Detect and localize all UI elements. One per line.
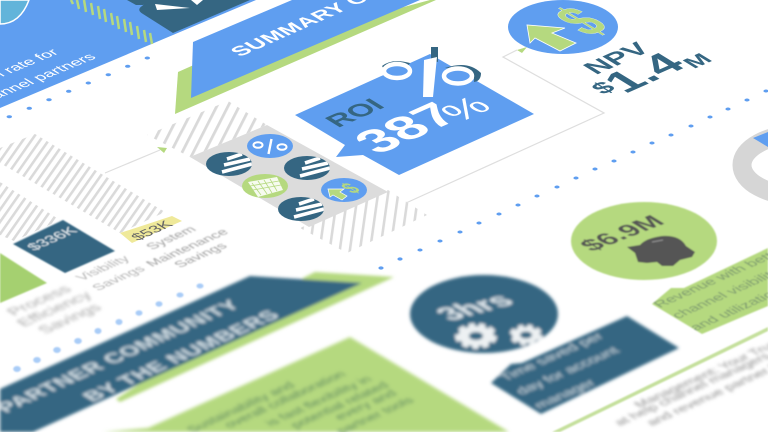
panel: top-left blue partner panel <box>0 0 256 108</box>
label: process efficiency savings: Savings <box>34 302 106 336</box>
connector: hatch to icon grid <box>105 147 167 173</box>
connector: ROI to NPV <box>406 47 604 203</box>
callout text: Time saved per <box>497 331 608 383</box>
value: 6.9M: $6.9M <box>573 212 671 255</box>
value: 336K: $336K <box>24 225 82 253</box>
text: NPV value: NPV <box>576 38 657 78</box>
icon: blue NPV circle: $ <box>336 180 367 197</box>
value: 53K: $53K <box>128 219 177 243</box>
panel: summary banner <box>175 0 436 114</box>
icon: gears <box>458 326 540 346</box>
label: visibility savings: Visibility <box>73 254 133 282</box>
text: NPV value <box>576 38 718 99</box>
bar: green process savings <box>0 253 47 303</box>
bar: visibility savings <box>13 220 115 273</box>
callout text: day for account <box>513 346 623 397</box>
label: process efficiency savings: Efficiency <box>13 289 97 329</box>
metric: 6.9M circle <box>571 202 717 280</box>
text: NPV value: M <box>678 50 718 72</box>
icon: green calendar circle <box>242 174 288 198</box>
icon: dark teal badge <box>127 0 250 33</box>
label: system maintenance savings: Maintenance <box>143 227 232 268</box>
text: NPV value: 1.4 <box>592 46 696 99</box>
label: process efficiency savings <box>3 283 106 336</box>
icon: light blue circle <box>0 0 29 24</box>
label: process efficiency savings: Process <box>3 283 76 318</box>
text: percent suffix: % <box>432 91 500 127</box>
panel: green text block <box>103 337 509 432</box>
label: system maintenance savings: Savings <box>171 241 230 269</box>
text: 387 value: 387 <box>342 96 471 160</box>
panel: ROI callout <box>295 47 534 175</box>
metric: 3hrs circle <box>410 275 558 353</box>
icon: teal bars circle <box>206 152 252 176</box>
icon: blue NPV circle <box>321 178 367 202</box>
label: visibility savings <box>73 254 148 292</box>
dotted line: right <box>378 90 768 270</box>
donut blue segment <box>753 132 768 147</box>
panel: community banner <box>0 272 394 432</box>
label: visibility savings: Savings <box>89 264 148 292</box>
icon: piggy bank <box>627 236 695 266</box>
donut chart <box>742 132 768 196</box>
dotted line: upper left <box>7 56 150 118</box>
paragraph: potential related <box>287 380 392 430</box>
callout text: manager <box>531 378 600 411</box>
heading: partner community by the numbers: BY THE NUMBERS <box>78 307 285 404</box>
icon: teal bars circle <box>284 156 330 180</box>
text: ROI label: ROI <box>318 95 391 131</box>
green up arrow <box>527 25 576 51</box>
paragraph: every and <box>331 388 400 422</box>
icon: percent circle <box>247 134 293 158</box>
paragraph <box>183 369 418 432</box>
callout: revenue <box>651 245 768 334</box>
green stripes <box>71 0 152 44</box>
panel: hatched background behind icon grid <box>147 101 427 253</box>
text: NPV value: $ <box>586 78 622 98</box>
callout: time saved <box>491 316 679 414</box>
callout text <box>497 331 623 411</box>
panel: grey icon grid <box>190 125 388 227</box>
icon: NPV dollar circle <box>508 0 623 54</box>
chart: savings bars <box>0 134 182 243</box>
bar: system maintenance savings <box>120 216 182 243</box>
dotted line: lower left <box>13 284 204 372</box>
arrow tip <box>517 47 527 53</box>
value: 3hrs: 3hrs <box>428 290 522 324</box>
divider: green rule <box>552 327 768 432</box>
paragraph: overall collaboration <box>220 369 349 430</box>
paragraph: is fast flexibility in <box>262 374 375 428</box>
icon: white arrow in badge <box>155 0 203 10</box>
arrow tip <box>157 147 167 153</box>
label: system maintenance savings: System <box>143 224 199 251</box>
icon: teal bars circle <box>278 197 324 221</box>
icon: big percent sign <box>382 47 481 97</box>
